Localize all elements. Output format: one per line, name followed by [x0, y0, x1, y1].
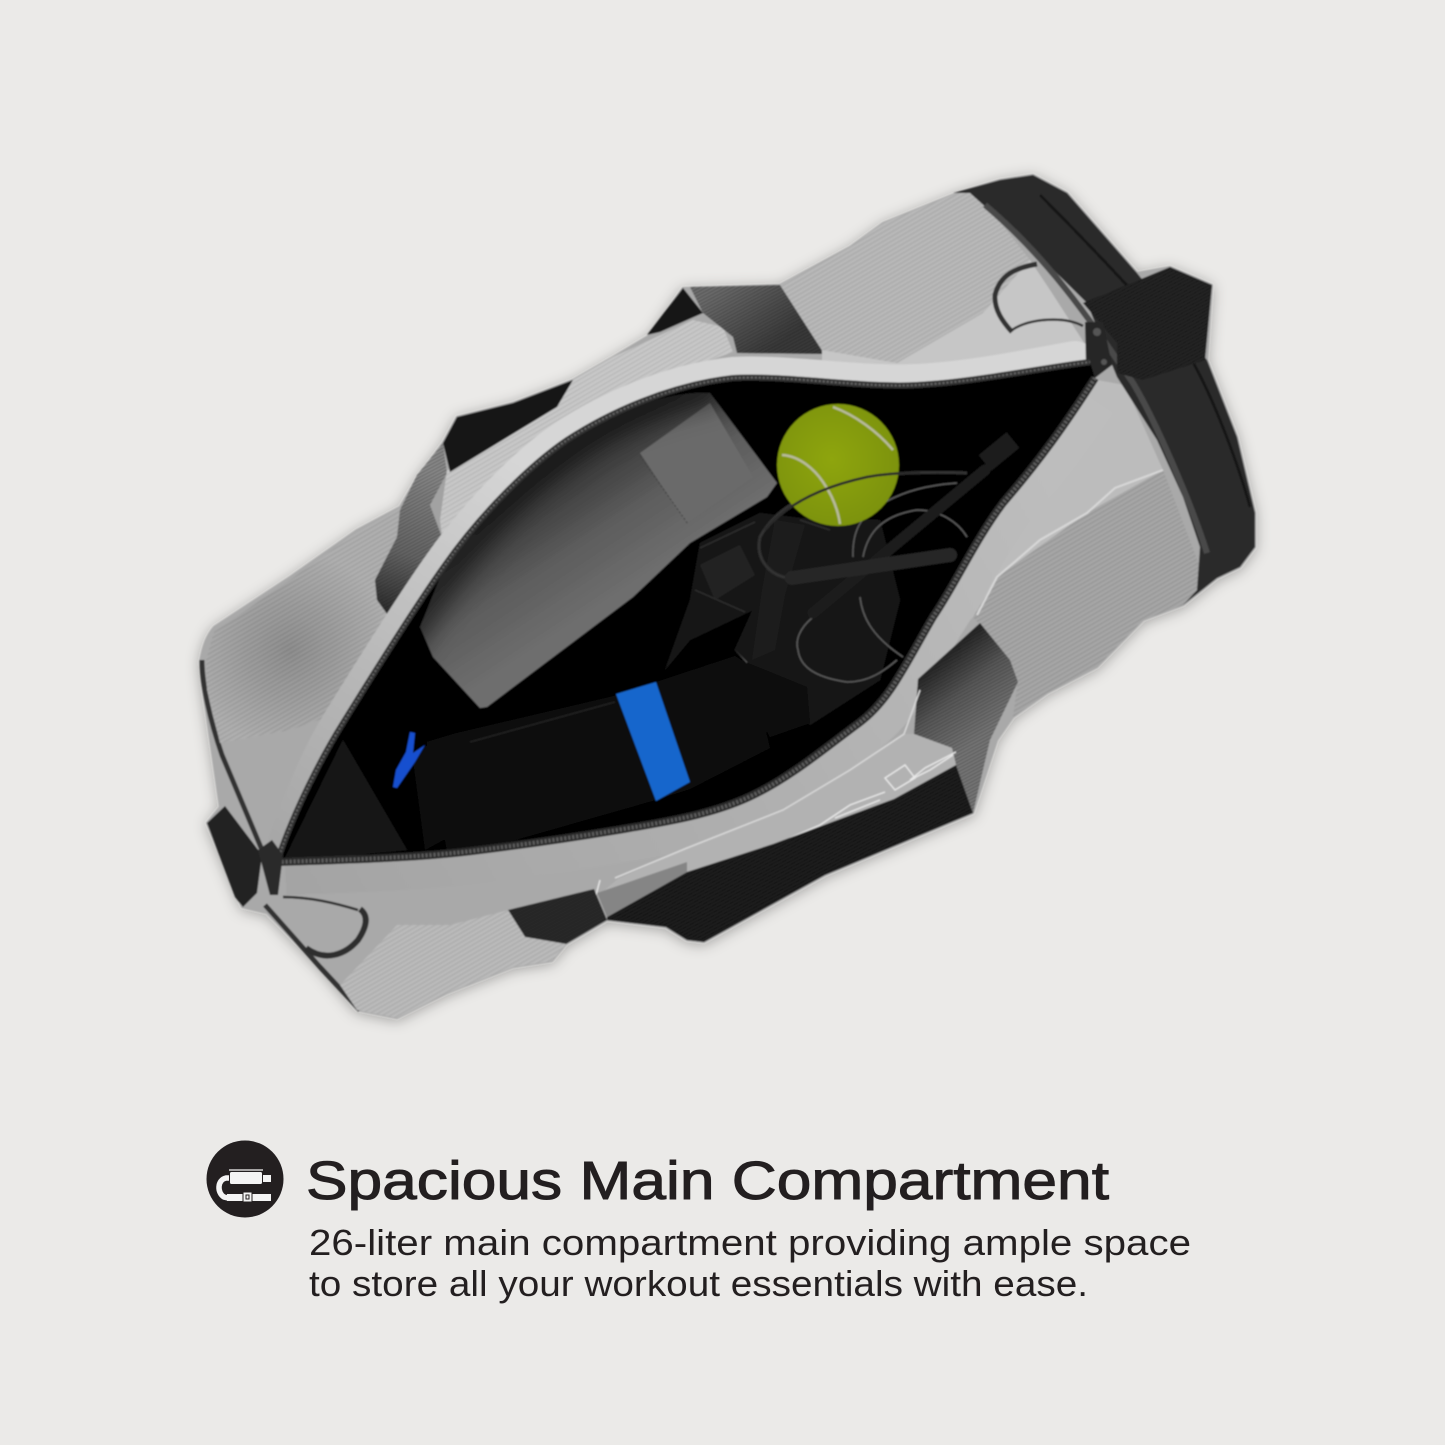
left end piping	[202, 660, 360, 1010]
gap in the gloves	[735, 610, 753, 663]
end cap piping	[985, 205, 1207, 553]
shadow along zipper	[400, 385, 720, 650]
shaker bottle	[393, 656, 770, 850]
bottle lid	[427, 733, 456, 849]
upper zipper	[279, 362, 1090, 856]
lower dark strap	[508, 889, 607, 944]
bottle blue spout	[393, 732, 425, 788]
grey top handle strap	[690, 285, 822, 354]
workout gloves	[665, 513, 900, 737]
logo mark	[596, 752, 956, 895]
right fabric lower panel	[973, 470, 1200, 717]
inner fold panel	[283, 740, 407, 862]
rolled mat	[400, 385, 777, 708]
right d-ring and cord	[995, 264, 1083, 332]
upper left fabric panel	[206, 507, 400, 743]
black top handle left	[443, 380, 573, 472]
black bottom handle	[607, 765, 973, 942]
skipping rope handles	[792, 440, 1013, 613]
upper fabric panel beside strap	[425, 470, 500, 567]
upper left grey handle strap	[375, 443, 447, 618]
icon: belt compartment	[206, 1140, 284, 1218]
compartment contents	[283, 385, 1013, 862]
upper zipper lip	[290, 362, 1075, 840]
right panel seam	[977, 470, 1163, 615]
left d-ring and cord	[283, 897, 366, 956]
tennis ball	[765, 404, 920, 530]
right fabric upper panel	[860, 380, 1163, 720]
black top handle right	[647, 288, 703, 335]
description text: 26-liter main compartment providing ample space	[309, 1222, 1191, 1263]
left zipper pull	[258, 840, 283, 895]
upper fabric panel	[440, 320, 733, 560]
upper right fabric panel	[780, 193, 1030, 363]
bag end cap	[953, 175, 1255, 605]
description text	[309, 1222, 1191, 1304]
lower zipper	[279, 378, 1095, 862]
lower zipper lip	[285, 395, 1085, 862]
skipping rope	[759, 472, 967, 682]
left end strap	[207, 806, 262, 907]
interior lining	[279, 362, 1095, 862]
lower textured fabric	[597, 734, 956, 917]
upper right light panel	[822, 260, 1092, 390]
lower strap grey section	[597, 862, 687, 917]
end cap strap	[1083, 267, 1212, 380]
right zipper pull	[1085, 322, 1112, 378]
description text: to store all your workout essentials with ease.	[309, 1263, 1088, 1304]
bottle blue band	[616, 682, 690, 801]
right grey handle strap	[914, 623, 1018, 813]
bag silhouette	[200, 175, 1255, 1018]
duffel bag illustration	[200, 175, 1255, 1018]
heading: Spacious Main Compartment	[306, 1151, 1109, 1211]
mat pocket	[640, 403, 741, 506]
lower body fabric	[340, 910, 566, 1018]
